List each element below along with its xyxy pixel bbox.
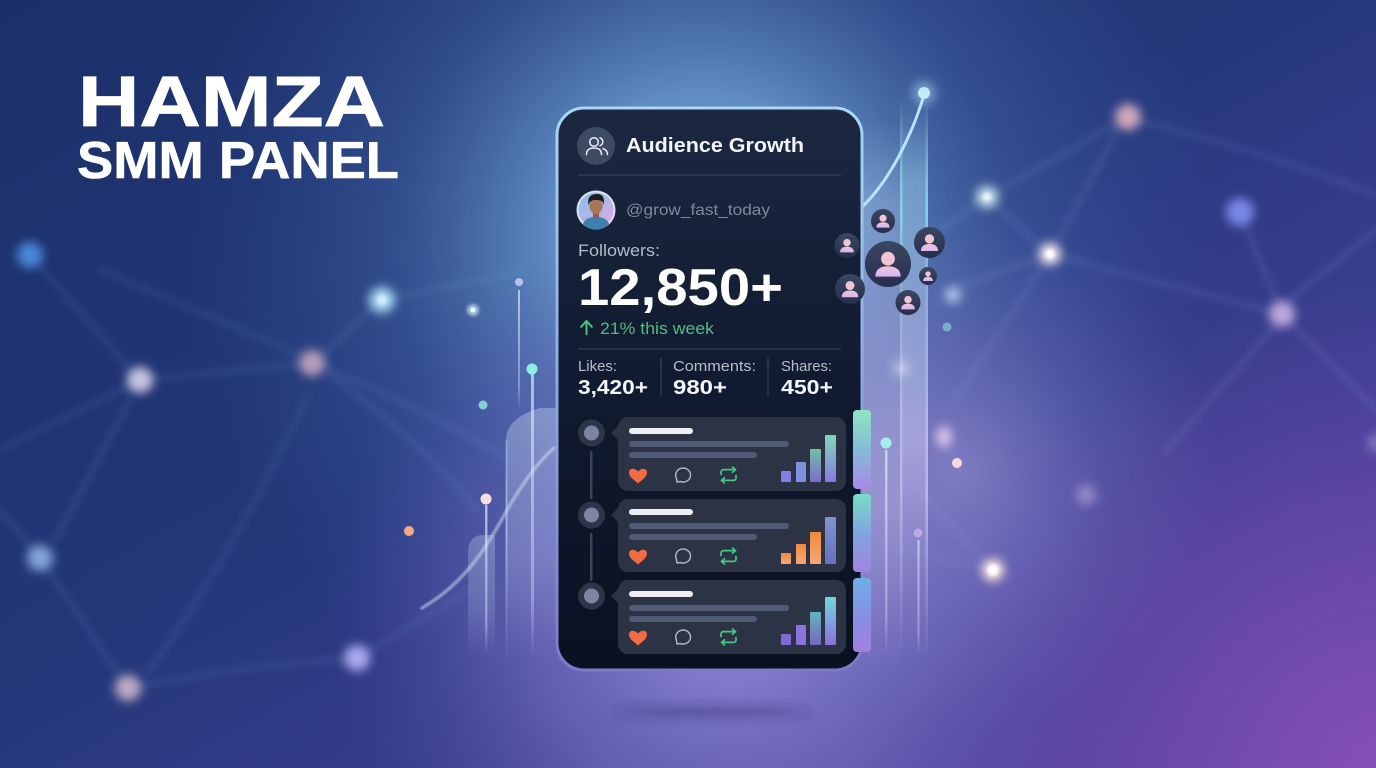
left translucent pillars (468, 408, 556, 660)
left network nodes (17, 242, 395, 701)
post card 3 (611, 580, 846, 654)
heading: Audience Growth: Audience Growth (626, 135, 804, 157)
left network constellation (0, 242, 525, 701)
post card 1 (611, 417, 846, 491)
title: HAMZA (78, 63, 385, 142)
followers count: 12,850+ (578, 259, 783, 317)
followers label: Followers: (578, 241, 660, 260)
title: SMM PANEL (77, 132, 399, 190)
title (77, 63, 399, 190)
panel: phone card (557, 108, 862, 670)
phone shadow (612, 708, 812, 716)
stat: comments (673, 358, 756, 399)
stat: comments: Comments: (673, 358, 756, 375)
stat: shares (781, 358, 833, 399)
right rising curve with end node (863, 81, 936, 206)
right network nodes (936, 104, 1376, 581)
stat: shares: 450+ (781, 377, 833, 399)
stat: likes: 3,420+ (578, 377, 648, 399)
floating pins and dots (404, 278, 962, 657)
stat: likes (578, 358, 648, 399)
stat: comments: 980+ (673, 377, 727, 399)
right network constellation (900, 104, 1376, 581)
post card 2 (611, 499, 846, 572)
right translucent pillars (863, 100, 928, 670)
growth indicator: 21% this week (600, 319, 715, 338)
profile avatar (576, 190, 616, 230)
left rising curve (422, 448, 554, 608)
icon: audience (577, 127, 615, 165)
handle: @grow_fast_today (626, 202, 770, 219)
stat: shares: Shares: (781, 358, 832, 375)
timeline (578, 420, 605, 610)
stat: likes: Likes: (578, 358, 617, 375)
follower avatar cluster (834, 209, 945, 315)
side tabs (853, 410, 871, 652)
